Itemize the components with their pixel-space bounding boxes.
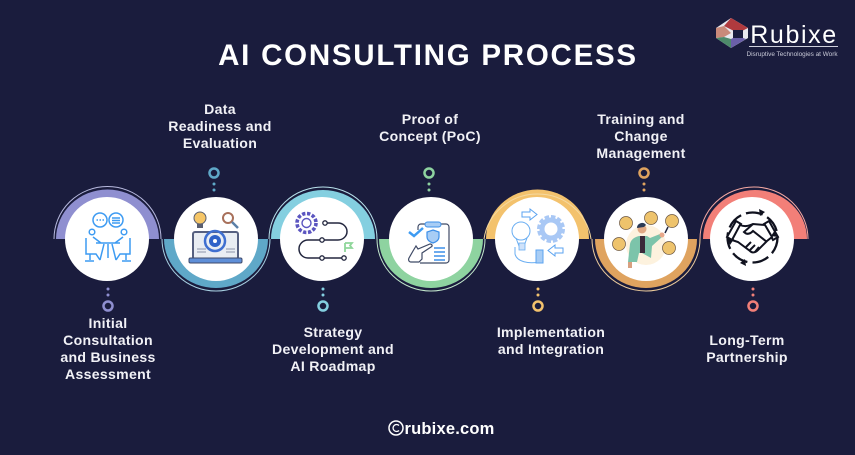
label: Change (614, 128, 668, 144)
label: Development and (272, 341, 394, 357)
connector dots (752, 288, 754, 296)
icon: laptop (189, 212, 242, 263)
label: Assessment (65, 366, 151, 382)
arc band (486, 190, 589, 239)
connector dots (536, 288, 540, 296)
arc outline (484, 194, 591, 239)
icon: meeting (85, 213, 131, 261)
step 4: Proof of Concept (377, 111, 485, 291)
label: Management (596, 145, 686, 161)
label: AI Roadmap (290, 358, 376, 374)
circle (65, 197, 149, 281)
icon: clipboard check (409, 222, 449, 263)
logo: Rubixe: Rubixe (750, 21, 838, 49)
circle (495, 197, 579, 281)
circle (280, 197, 364, 281)
label: Proof of (402, 111, 458, 127)
label: Consultation (63, 332, 153, 348)
icon: bulb and gear (512, 209, 564, 263)
step 6: Training (592, 111, 700, 291)
arc outline (377, 239, 485, 291)
arc band (271, 190, 375, 239)
step 2: Data Readiness (162, 101, 272, 291)
label: Long-Term (709, 332, 785, 348)
label: Concept (PoC) (379, 128, 481, 144)
label: Initial (89, 315, 127, 331)
label: Partnership (706, 349, 788, 365)
label: Readiness and (168, 118, 272, 134)
connector dots (428, 182, 430, 192)
label: and Integration (498, 341, 604, 357)
marker (748, 302, 758, 310)
arc outline (700, 187, 808, 239)
label: Implementation (497, 324, 605, 340)
arc outline (269, 187, 377, 239)
step 1: Initial Consultation (54, 187, 161, 382)
marker (640, 168, 648, 178)
step 7: Long-Term Partnership (700, 187, 808, 365)
circle (174, 197, 258, 281)
label: Evaluation (183, 135, 257, 151)
connector dots (322, 288, 324, 296)
label: Training and (597, 111, 685, 127)
icon: handshake (727, 209, 778, 266)
step 5: Implementation (484, 190, 605, 357)
connector dots (642, 182, 646, 192)
marker (104, 302, 112, 310)
arc band (379, 239, 483, 288)
footer: rubixe.com: rubixe.com (404, 420, 495, 438)
icon: roadmap (297, 214, 352, 260)
logo: Rubixe: Disruptive Technologies at Work (746, 51, 838, 58)
arc band (164, 239, 268, 288)
title: AI CONSULTING PROCESS (218, 39, 638, 72)
icon: presenter (612, 212, 678, 268)
circle (604, 197, 688, 281)
connector dots (106, 288, 110, 296)
arc band (703, 190, 807, 239)
arc outline (54, 187, 161, 239)
marker (534, 302, 542, 310)
marker (318, 302, 328, 310)
connector dots (212, 182, 216, 192)
circle (710, 197, 794, 281)
label: and Business (60, 349, 156, 365)
arc outline (162, 239, 270, 291)
step 3: Strategy (269, 187, 394, 374)
label: Strategy (304, 324, 362, 340)
label: Data (204, 101, 236, 117)
circle (389, 197, 473, 281)
arc band (56, 190, 159, 239)
logo: Rubixe (716, 18, 838, 58)
marker (424, 168, 434, 178)
arc band (595, 239, 697, 288)
arc outline (592, 239, 700, 291)
marker (210, 168, 218, 178)
